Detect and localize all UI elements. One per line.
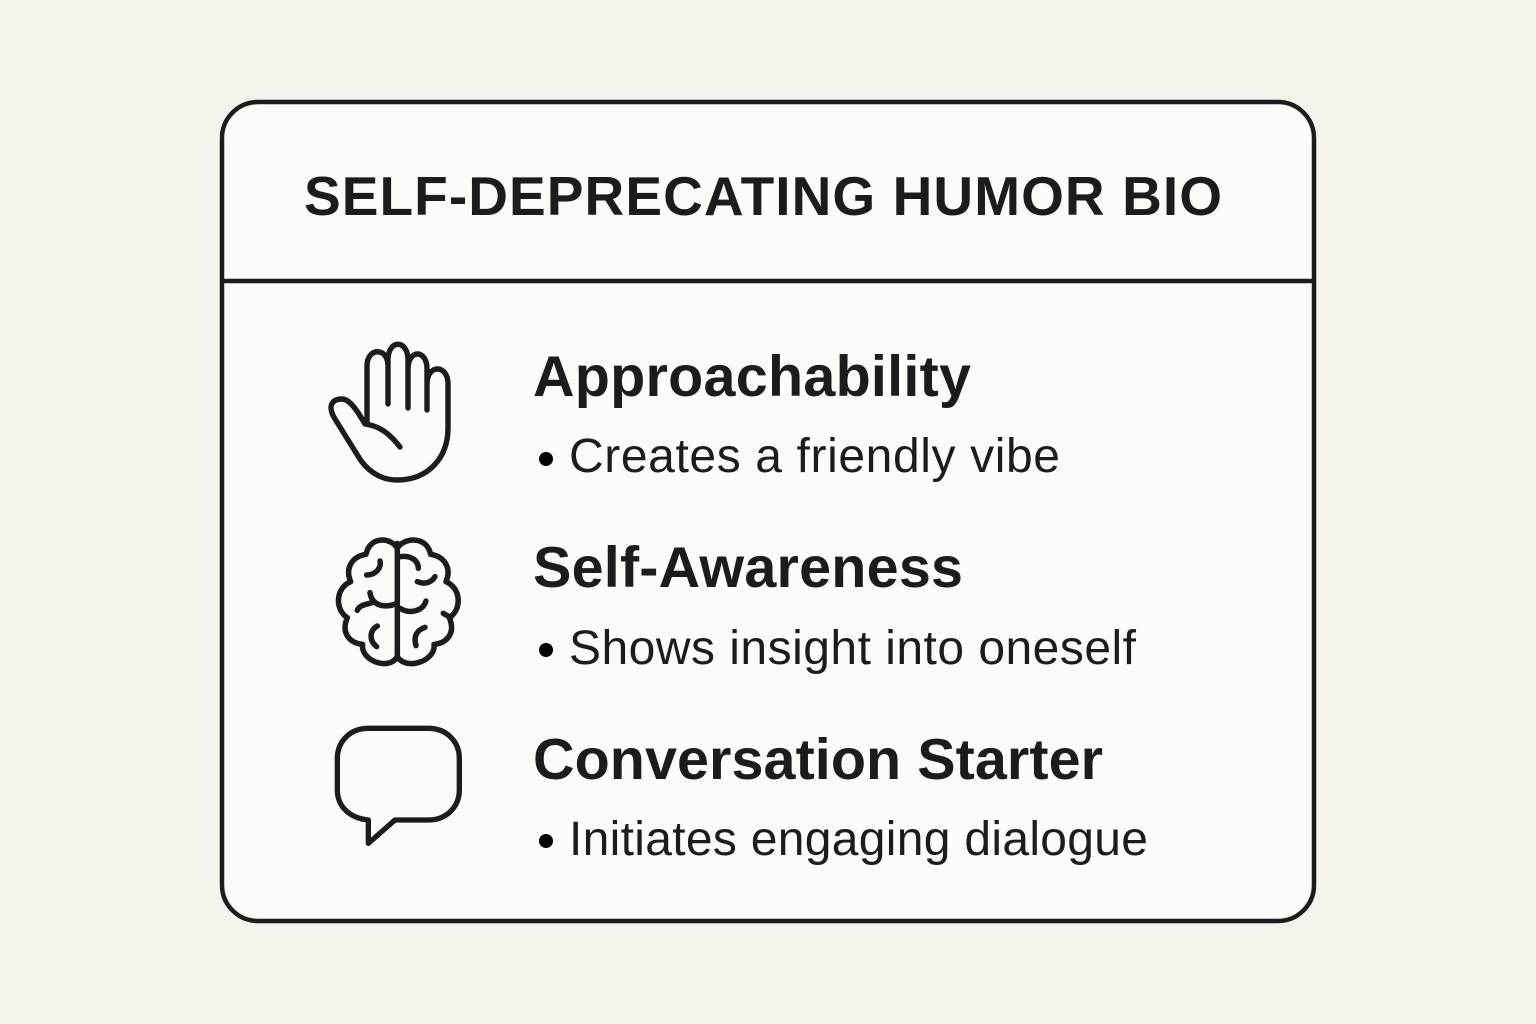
heading: Conversation Starter: Conversation Starter: [533, 728, 1103, 792]
icon: speech bubble: [337, 728, 459, 843]
icon: raised hand: [331, 344, 448, 480]
heading: Approachability: Approachability: [533, 345, 971, 409]
bullet: insight: Shows insight into oneself: [569, 622, 1137, 675]
bullet: dialogue: Initiates engaging dialogue: [569, 813, 1148, 866]
icon: brain: [338, 540, 458, 664]
row: approachability: [331, 344, 1060, 483]
panel: bio card: [222, 102, 1314, 921]
row: conversation starter: [337, 728, 1148, 866]
heading: Self-Awareness: Self-Awareness: [533, 536, 963, 600]
bullet: friendly vibe: Creates a friendly vibe: [569, 430, 1060, 483]
row: self-awareness: [338, 536, 1137, 675]
title: SELF-DEPRECATING HUMOR BIO: [304, 165, 1222, 227]
